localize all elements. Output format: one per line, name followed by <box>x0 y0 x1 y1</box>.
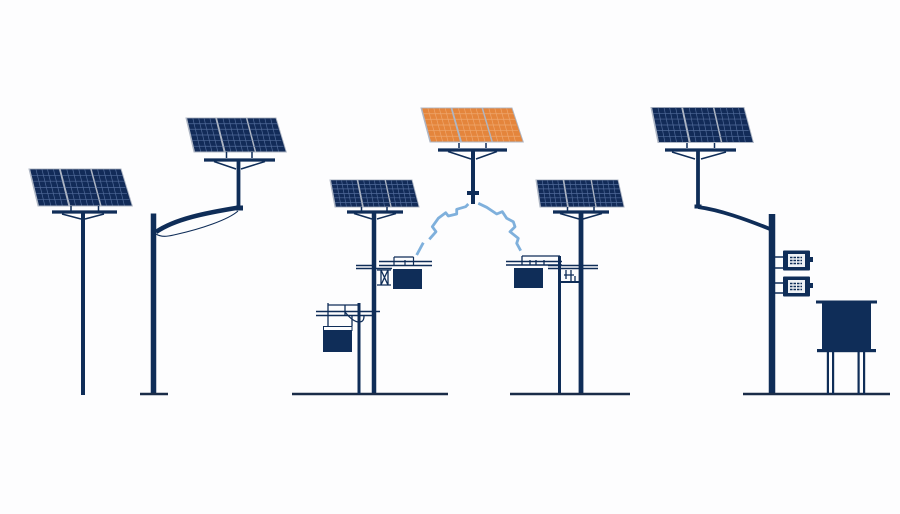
mount and arm 2 <box>140 152 275 394</box>
lamp 5: pole with controllers and cabinet <box>651 108 890 394</box>
mount and pole 1 <box>52 206 117 395</box>
controller box lower <box>772 276 813 296</box>
right battery box <box>506 256 598 288</box>
lamp 1: simple pole <box>29 169 132 395</box>
left upper battery box <box>356 257 432 289</box>
central networked group <box>292 108 630 394</box>
solar array 2 <box>186 118 286 152</box>
solar array 5 <box>651 108 753 142</box>
right pole and mount <box>510 207 630 394</box>
solar array 1 <box>29 169 132 206</box>
orange array mount <box>438 143 507 204</box>
wireless link right <box>478 203 521 251</box>
left lower battery box <box>316 303 380 394</box>
left pole and mount <box>292 207 448 394</box>
controller box upper <box>772 250 813 270</box>
right solar array <box>536 180 624 207</box>
lamp 2: cantilever arm <box>140 118 286 394</box>
battery cabinet <box>816 300 877 394</box>
orange solar array <box>421 108 523 142</box>
mount and arm 5 <box>665 143 890 394</box>
wireless link left <box>417 204 468 255</box>
left solar array <box>330 180 419 207</box>
